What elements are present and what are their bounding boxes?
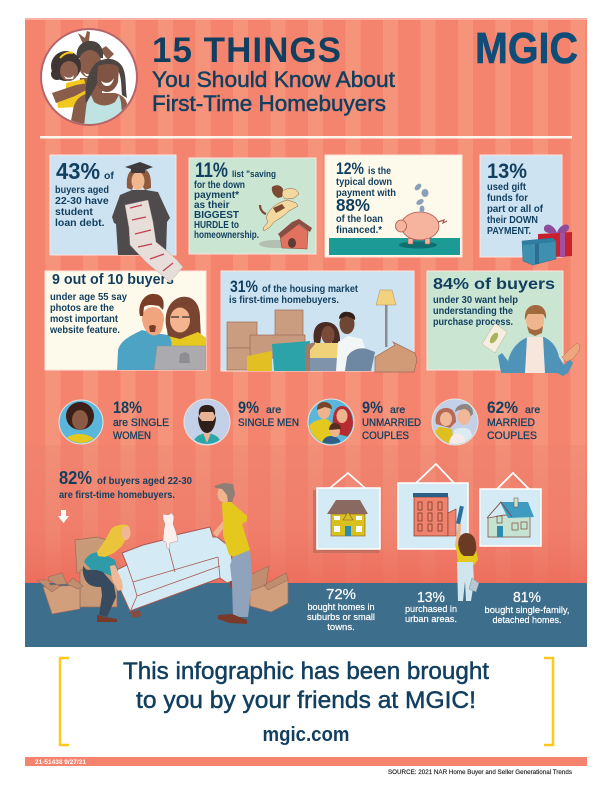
stat: 11%: homeownership. [194, 230, 259, 241]
stat: unmarried couples: 9% [362, 398, 383, 417]
stat: 43%: 22-30 have [55, 195, 109, 207]
stat: 9 out of 10: photos are the [50, 302, 114, 314]
picture frame: suburb house [313, 473, 380, 553]
stat: 13%: their DOWN [487, 214, 538, 226]
illustration: couple on couch with boxes [227, 290, 417, 372]
stat: 31% [229, 277, 358, 306]
stat: 43%: 43% [56, 158, 100, 184]
panel: gift funds [480, 155, 572, 265]
stat: 9 out of 10: 9 out of 10 buyers [52, 271, 174, 288]
stat: 12% and 88%: payment with [336, 187, 396, 199]
panel: student loan debt [50, 155, 176, 255]
icon: dog and doghouse [259, 185, 312, 249]
stat: single men: are [266, 404, 281, 416]
background wall [25, 18, 587, 584]
stat: 12% and 88%: financed.* [336, 224, 383, 236]
stat: 81% single-family [484, 589, 570, 626]
stat: 84% of buyers: 84% of buyers [433, 276, 555, 293]
stat: 43%: student [55, 206, 93, 218]
stat: 11%: list "saving [232, 169, 276, 180]
title [152, 31, 395, 116]
stat: 13%: funds for [487, 192, 528, 204]
stat: 72% suburbs: towns. [327, 622, 355, 633]
yellow brackets [60, 658, 553, 745]
stat: 43%: of [104, 170, 114, 182]
stat: 9 out of 10: most important [50, 313, 118, 325]
stat: single women: 18% [113, 398, 142, 417]
icon: graduate [112, 162, 170, 255]
stat: unmarried couples [308, 398, 421, 445]
stat: 43%: buyers aged [55, 184, 109, 196]
woman [83, 525, 130, 622]
stat: 84% of buyers [433, 276, 555, 328]
building [413, 493, 456, 536]
closing message [60, 658, 553, 746]
stat: single women: are SINGLE [113, 417, 169, 429]
stat: 43% [55, 158, 114, 229]
stat: 43%: loan debt. [55, 217, 105, 229]
stat: 12% and 88%: 12% [336, 159, 364, 178]
stat: 81% single-family: detached homes. [492, 615, 562, 626]
closing message: to you by your friends at MGIC! [136, 687, 476, 714]
stat: single men: SINGLE MEN [238, 417, 299, 429]
icon: loan paper scroll [125, 200, 183, 282]
stat: 11%: payment* [194, 190, 239, 201]
stat: 72% suburbs: bought homes in [308, 602, 374, 613]
footer strip: 21-51438 9/27/21 [35, 759, 86, 766]
stat: 11%: as their [194, 200, 230, 211]
stat: 82% first-time buyers: of buyers aged 22-30 [97, 475, 192, 487]
stat: 13% [487, 159, 543, 237]
stat: 12% and 88% [336, 159, 396, 236]
picture frame: urban building [398, 464, 468, 549]
stat: 82% first-time buyers: 82% [59, 468, 92, 488]
stat: single women [59, 398, 169, 445]
stat: 11% [194, 159, 276, 241]
stat: 11%: HURDLE to [194, 220, 239, 231]
picture frame: single-family house [480, 473, 541, 546]
stat: 13%: 13% [487, 159, 527, 183]
icon: piggy bank [396, 182, 447, 248]
stat: 84% of buyers: purchase process. [433, 316, 513, 328]
stat: 31%: 31% [230, 277, 258, 296]
stat: 9 out of 10 [49, 271, 174, 336]
stat: 72% suburbs: 72% [326, 586, 356, 603]
boxes [37, 537, 288, 614]
header divider [40, 136, 572, 138]
panel: housing market [221, 271, 417, 372]
stat: 84% of buyers: understanding the [433, 305, 513, 317]
stat: 31%: of the housing market [262, 283, 358, 295]
footer strip [25, 757, 587, 766]
man [213, 483, 252, 624]
illustration: girl painting [455, 506, 479, 601]
stat: 9 out of 10: website feature. [49, 324, 120, 336]
stat: 72% suburbs: suburbs or small [307, 612, 375, 623]
stat: unmarried couples: UNMARRIED [362, 417, 421, 429]
house [327, 500, 368, 536]
stat: 12% and 88%: 88% [336, 195, 370, 215]
stat: 82% first-time buyers: are first-time homebuyers. [59, 489, 175, 501]
stat: 12% and 88%: is the [368, 165, 391, 177]
stat: married couples [432, 398, 540, 445]
stat: 31%: is first-time homebuyers. [229, 294, 339, 306]
closing message: This infographic has been brought [123, 658, 489, 685]
title: First-Time Homebuyers [152, 91, 386, 116]
stat: married couples: are [525, 404, 540, 416]
stat: married couples: MARRIED [487, 417, 535, 429]
house [487, 498, 534, 537]
stat: 13% urban: urban areas. [405, 614, 457, 625]
stat: unmarried couples: are [390, 404, 405, 416]
closing message: mgic.com [262, 724, 350, 746]
stat: single men: 9% [238, 398, 259, 417]
stat: 13%: part or all of [487, 203, 543, 215]
stat: 13%: used gift [487, 181, 526, 193]
panel: saving hurdle [189, 158, 316, 254]
stat: 11%: BIGGEST [194, 210, 239, 221]
stat: 11%: 11% [195, 159, 228, 182]
stat: 11%: for the down [194, 180, 245, 191]
title: 15 THINGS [152, 31, 342, 70]
cat [163, 513, 178, 549]
couch [112, 527, 236, 618]
stat: 13% urban [405, 589, 457, 625]
stat: married couples: 62% [487, 398, 518, 417]
illustration: man with document [482, 305, 580, 376]
stat: 84% of buyers: under 30 want help [433, 294, 518, 306]
floor band [25, 583, 587, 647]
icon: gift boxes [522, 225, 572, 265]
stat: 13% urban: 13% [417, 589, 445, 606]
stat: 72% suburbs [307, 586, 375, 633]
stat: 13%: PAYMENT. [487, 225, 531, 237]
stat: single men [184, 398, 299, 445]
family portrait icon [41, 29, 137, 126]
illustration: couple moving couch [37, 483, 288, 624]
MGIC logo: MGIC [475, 24, 578, 73]
stat: single women: WOMEN [113, 430, 151, 442]
stat: 13% urban: purchased in [405, 604, 457, 615]
stat: 81% single-family: bought single-family, [484, 605, 570, 616]
panel: typical down payment [325, 155, 462, 257]
panel: photos [45, 271, 206, 372]
stat: 9 out of 10: under age 55 say [50, 291, 127, 303]
stat: married couples: COUPLES [487, 430, 537, 442]
title: You Should Know About [152, 67, 395, 92]
illustration: couple at laptop [117, 294, 206, 372]
panel: purchase process help [427, 271, 580, 376]
arrow: pointing down [58, 510, 69, 523]
stat: 12% and 88%: of the loan [336, 213, 383, 225]
stat: 82% first-time buyers [59, 468, 192, 501]
stat: 12% and 88%: typical down [336, 176, 392, 188]
stat: 81% single-family: 81% [513, 589, 541, 606]
stat: unmarried couples: COUPLES [362, 430, 409, 442]
source note: SOURCE: 2021 NAR Home Buyer and Seller Generational Trends [388, 769, 573, 776]
